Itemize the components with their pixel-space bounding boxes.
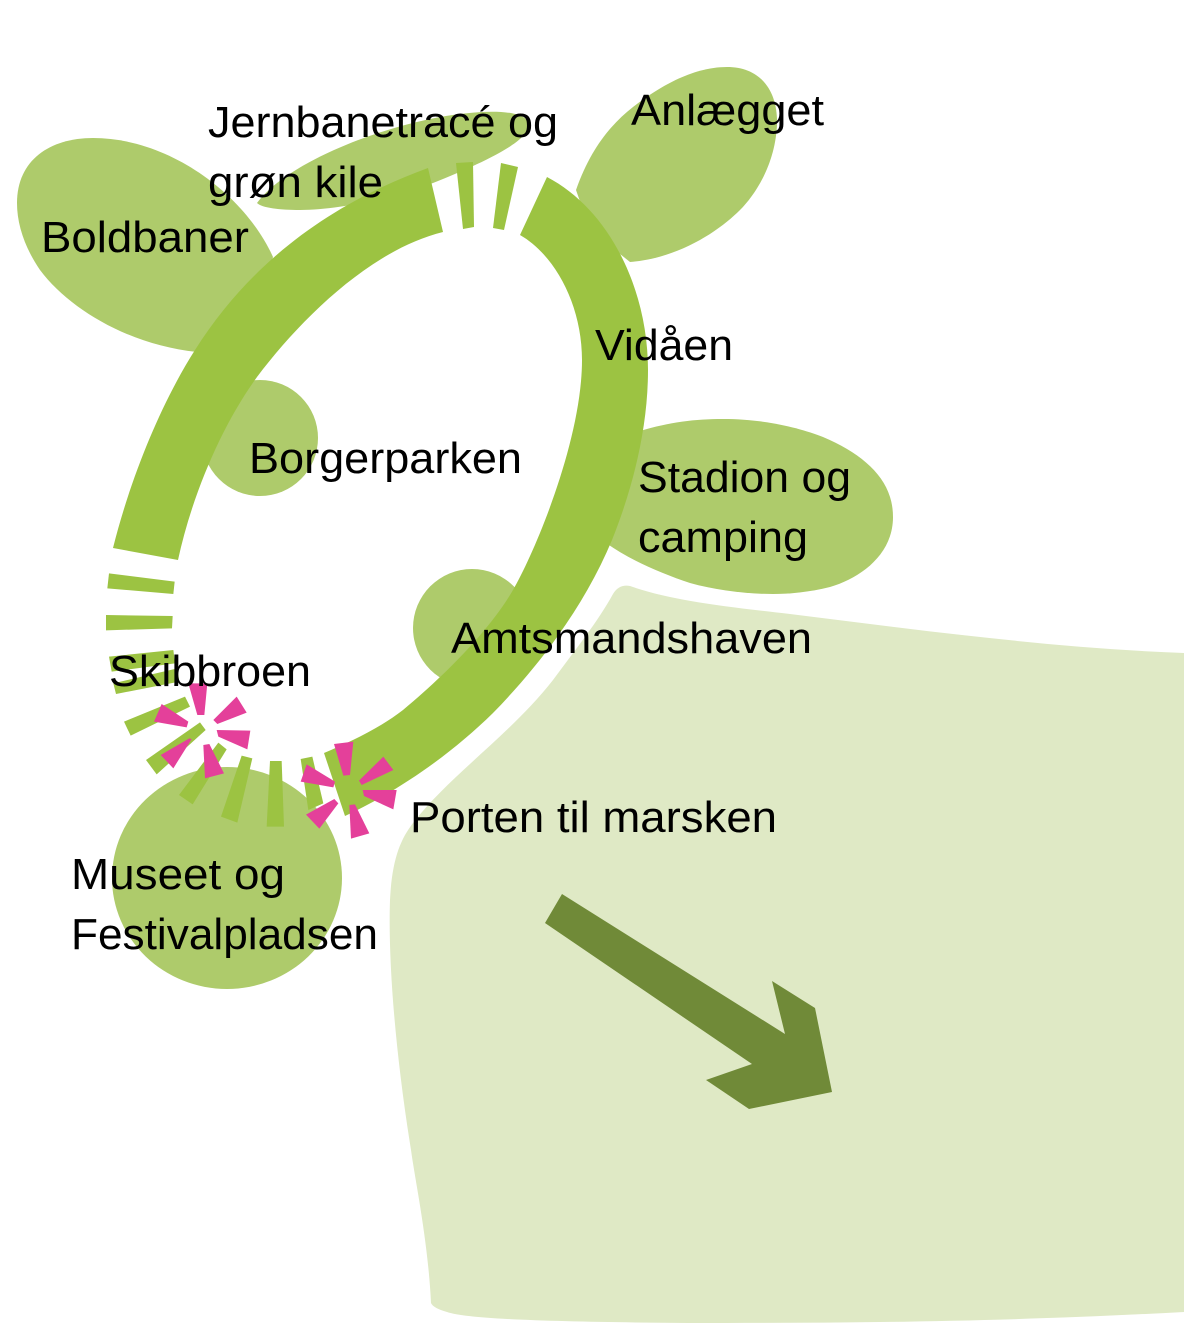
ring: left segment [113,168,443,560]
label: Anlægget: Anlægget [631,86,824,135]
icon: pink star Porten til marsken [301,742,397,839]
leaf: Stadion og camping [606,419,893,594]
label: Porten til marsken: Porten til marsken [410,793,777,842]
label: Stadion og camping: camping [638,513,808,562]
circle: Museet og Festivalpladsen [112,767,342,989]
label: Jernbanetracé og grøn kile: Jernbanetracé og [208,98,558,147]
label: Museet og Festivalpladsen: Museet og [71,850,285,899]
circle: Amtsmandshaven [413,569,531,687]
arrow: towards the marsh [545,894,832,1109]
circle: Borgerparken [202,380,318,496]
label: Skibbroen: Skibbroen [109,647,311,696]
ring: top dashes [456,162,518,230]
icon: pink star Skibbroen [154,683,250,778]
ring: lower left dashes [106,573,323,827]
label: Boldbaner: Boldbaner [41,213,249,262]
leaf: Jernbanetracé og grøn kile [257,112,529,210]
label: Museet og Festivalpladsen [71,850,378,959]
label: Stadion og camping: Stadion og [638,453,851,502]
label: Museet og Festivalpladsen: Festivalpladsen [71,910,378,959]
label: Jernbanetracé og grøn kile [208,98,558,207]
label: Stadion og camping [638,453,851,562]
leaf: Anlægget [576,67,777,262]
label: Amtsmandshaven: Amtsmandshaven [451,614,812,663]
label: Jernbanetracé og grøn kile: grøn kile [208,158,383,207]
label: Borgerparken: Borgerparken [249,434,522,483]
panel: marsh area [390,586,1184,1323]
leaf: Boldbaner [17,138,273,352]
label: Vidåen: Vidåen [595,321,733,370]
ring: right segment [324,177,648,816]
